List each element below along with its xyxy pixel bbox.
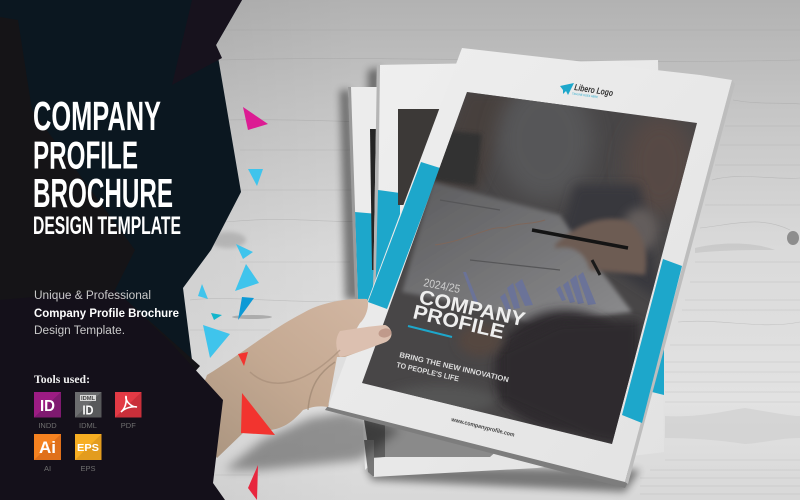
back brochure [348, 87, 395, 470]
icon: IDML [75, 392, 102, 430]
icon: EPS [75, 434, 102, 473]
icon: paper plane [560, 83, 574, 95]
logo: TAGLINE GOES HERE [572, 92, 598, 99]
description text: Unique & Professional [34, 290, 151, 302]
icon: EPS: EPS [77, 442, 99, 454]
cover title: BRING THE NEW INNOVATION [399, 350, 510, 384]
dark panel: left dark facet [0, 17, 200, 400]
cover title: TO PEOPLE'S LIFE [396, 360, 460, 383]
chart paper [402, 182, 632, 325]
shadow beneath brochures [340, 68, 640, 492]
icon: EPS: EPS [80, 464, 96, 473]
front brochure [325, 48, 735, 488]
middle brochure [364, 60, 664, 477]
icon: AI: AI [44, 464, 51, 473]
icon: AI [34, 434, 61, 473]
dark panel: upper purple facet [172, 0, 242, 85]
logo: Libero Logo [574, 82, 614, 98]
tools icons [34, 392, 142, 473]
main heading: PROFILE [33, 134, 138, 178]
icon: IDML: ID [82, 404, 94, 418]
main heading: BROCHURE [33, 170, 173, 216]
hand holding brochure [190, 299, 392, 458]
cover title: PROFILE [411, 301, 506, 344]
icon: IDML: IDML [81, 396, 96, 402]
colored triangles [198, 107, 275, 500]
cover title: 2024/25 [422, 277, 461, 296]
shadow under hand [225, 412, 400, 470]
description text: Company Profile Brochure [34, 308, 179, 320]
cyan band left [368, 162, 440, 309]
website: www.companyprofile.com [450, 417, 515, 439]
icon: INDD: INDD [38, 421, 57, 430]
icon: INDD [34, 392, 61, 430]
icon: AI: Ai [39, 438, 56, 457]
cyan band right [622, 259, 682, 423]
description text: Design Template. [34, 325, 125, 337]
description text [34, 290, 179, 337]
main heading [33, 93, 181, 240]
icon: IDML: IDML [79, 421, 97, 430]
dark panel: lower black [0, 290, 225, 500]
logo [560, 82, 614, 99]
cover title [396, 277, 528, 384]
cover photo [362, 92, 697, 444]
main heading: DESIGN TEMPLATE [33, 212, 181, 240]
tools used heading: Tools used: [34, 374, 90, 386]
dark panel: upper navy [0, 0, 242, 380]
icon: PDF: PDF [121, 421, 136, 430]
main heading: COMPANY [33, 93, 161, 139]
cover title: COMPANY [417, 286, 528, 331]
hand with pen [555, 219, 646, 275]
icon: INDD: ID [40, 398, 55, 415]
